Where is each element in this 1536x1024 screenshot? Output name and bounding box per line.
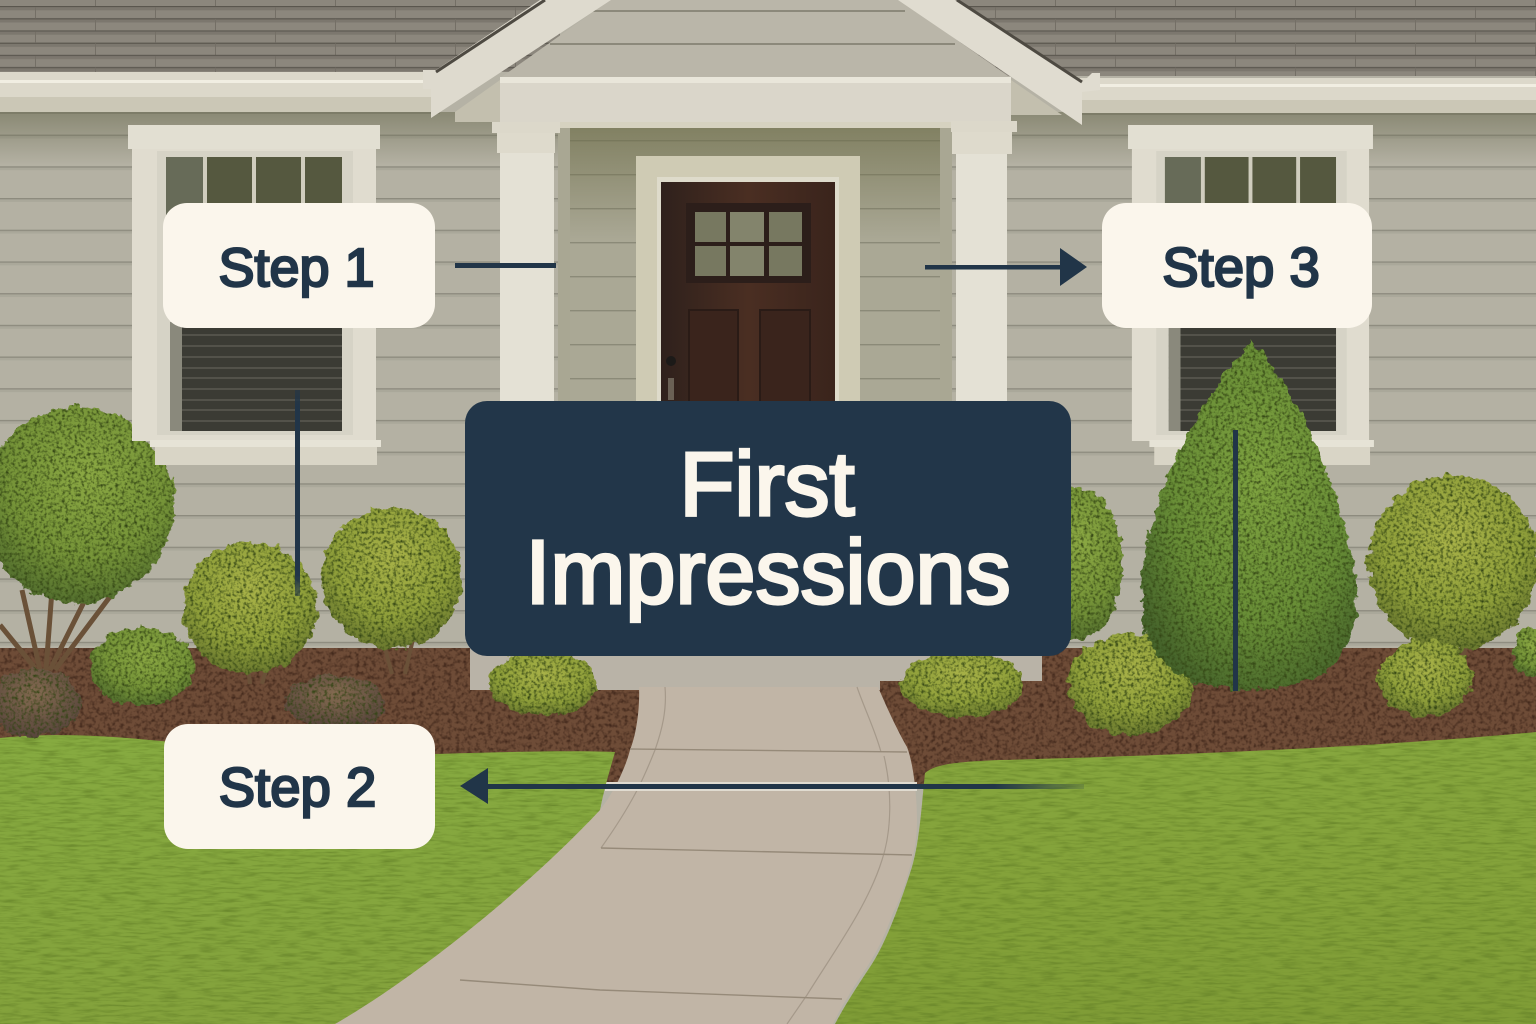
eave trim right (1080, 78, 1536, 115)
shrub: large round left (0, 407, 174, 603)
right column (951, 121, 1017, 405)
shrub: reddish centre (285, 676, 385, 728)
shrub: yellow-green near step one (183, 542, 317, 674)
left tall shrub trunks (0, 590, 115, 670)
connector: step 1 horizontal line (455, 263, 556, 268)
left window (128, 125, 381, 465)
porch gable (423, 0, 1100, 125)
foundation (470, 600, 1042, 690)
shrub stems (245, 630, 415, 684)
mulch bed (0, 648, 1536, 788)
step 3 card (1102, 203, 1372, 328)
title panel (465, 401, 1071, 656)
shrub stems right (1435, 620, 1475, 664)
connector: vertical line through evergreen (1233, 430, 1238, 691)
shrub: round yellow right (1068, 633, 1194, 735)
lawn right (835, 732, 1536, 1024)
shrub: yellow-green right of step one (322, 507, 462, 649)
porch beam (500, 77, 1011, 128)
right window (1128, 125, 1374, 465)
step 3 card: Step 3 (1162, 237, 1320, 298)
shrub: low left of walk (489, 652, 597, 716)
lawn left (0, 735, 615, 1024)
left column (492, 122, 560, 405)
shrub: low right of walk (900, 651, 1024, 717)
step 2 card (164, 724, 435, 849)
arrow: to step 2 (460, 768, 1084, 804)
step 1 card: Step 1 (218, 238, 375, 298)
title text: First: First (680, 435, 854, 535)
connector: vertical line under step 1 (295, 390, 300, 596)
shrub: round far right (1368, 475, 1536, 651)
arrow halo on walkway (605, 782, 917, 791)
eave trim left (0, 72, 440, 114)
shrub: low green (90, 628, 194, 706)
roof right (950, 0, 1536, 76)
title text: Impressions: Impressions (525, 523, 1011, 623)
front door (636, 156, 860, 407)
shrub: behind title right (1029, 487, 1123, 641)
house wall siding (0, 110, 1536, 655)
shrub: edge far right (1512, 628, 1536, 676)
roof left (0, 0, 560, 72)
shrub: reddish left (0, 669, 81, 737)
arrow: to step 3 (925, 248, 1087, 286)
shrub: tall conical evergreen (1141, 340, 1357, 690)
walkway (335, 687, 917, 1024)
porch recess wall (558, 122, 952, 415)
step 2 card: Step 2 (219, 757, 376, 818)
step 1 card (163, 203, 435, 328)
shrub: low far right (1378, 640, 1472, 716)
